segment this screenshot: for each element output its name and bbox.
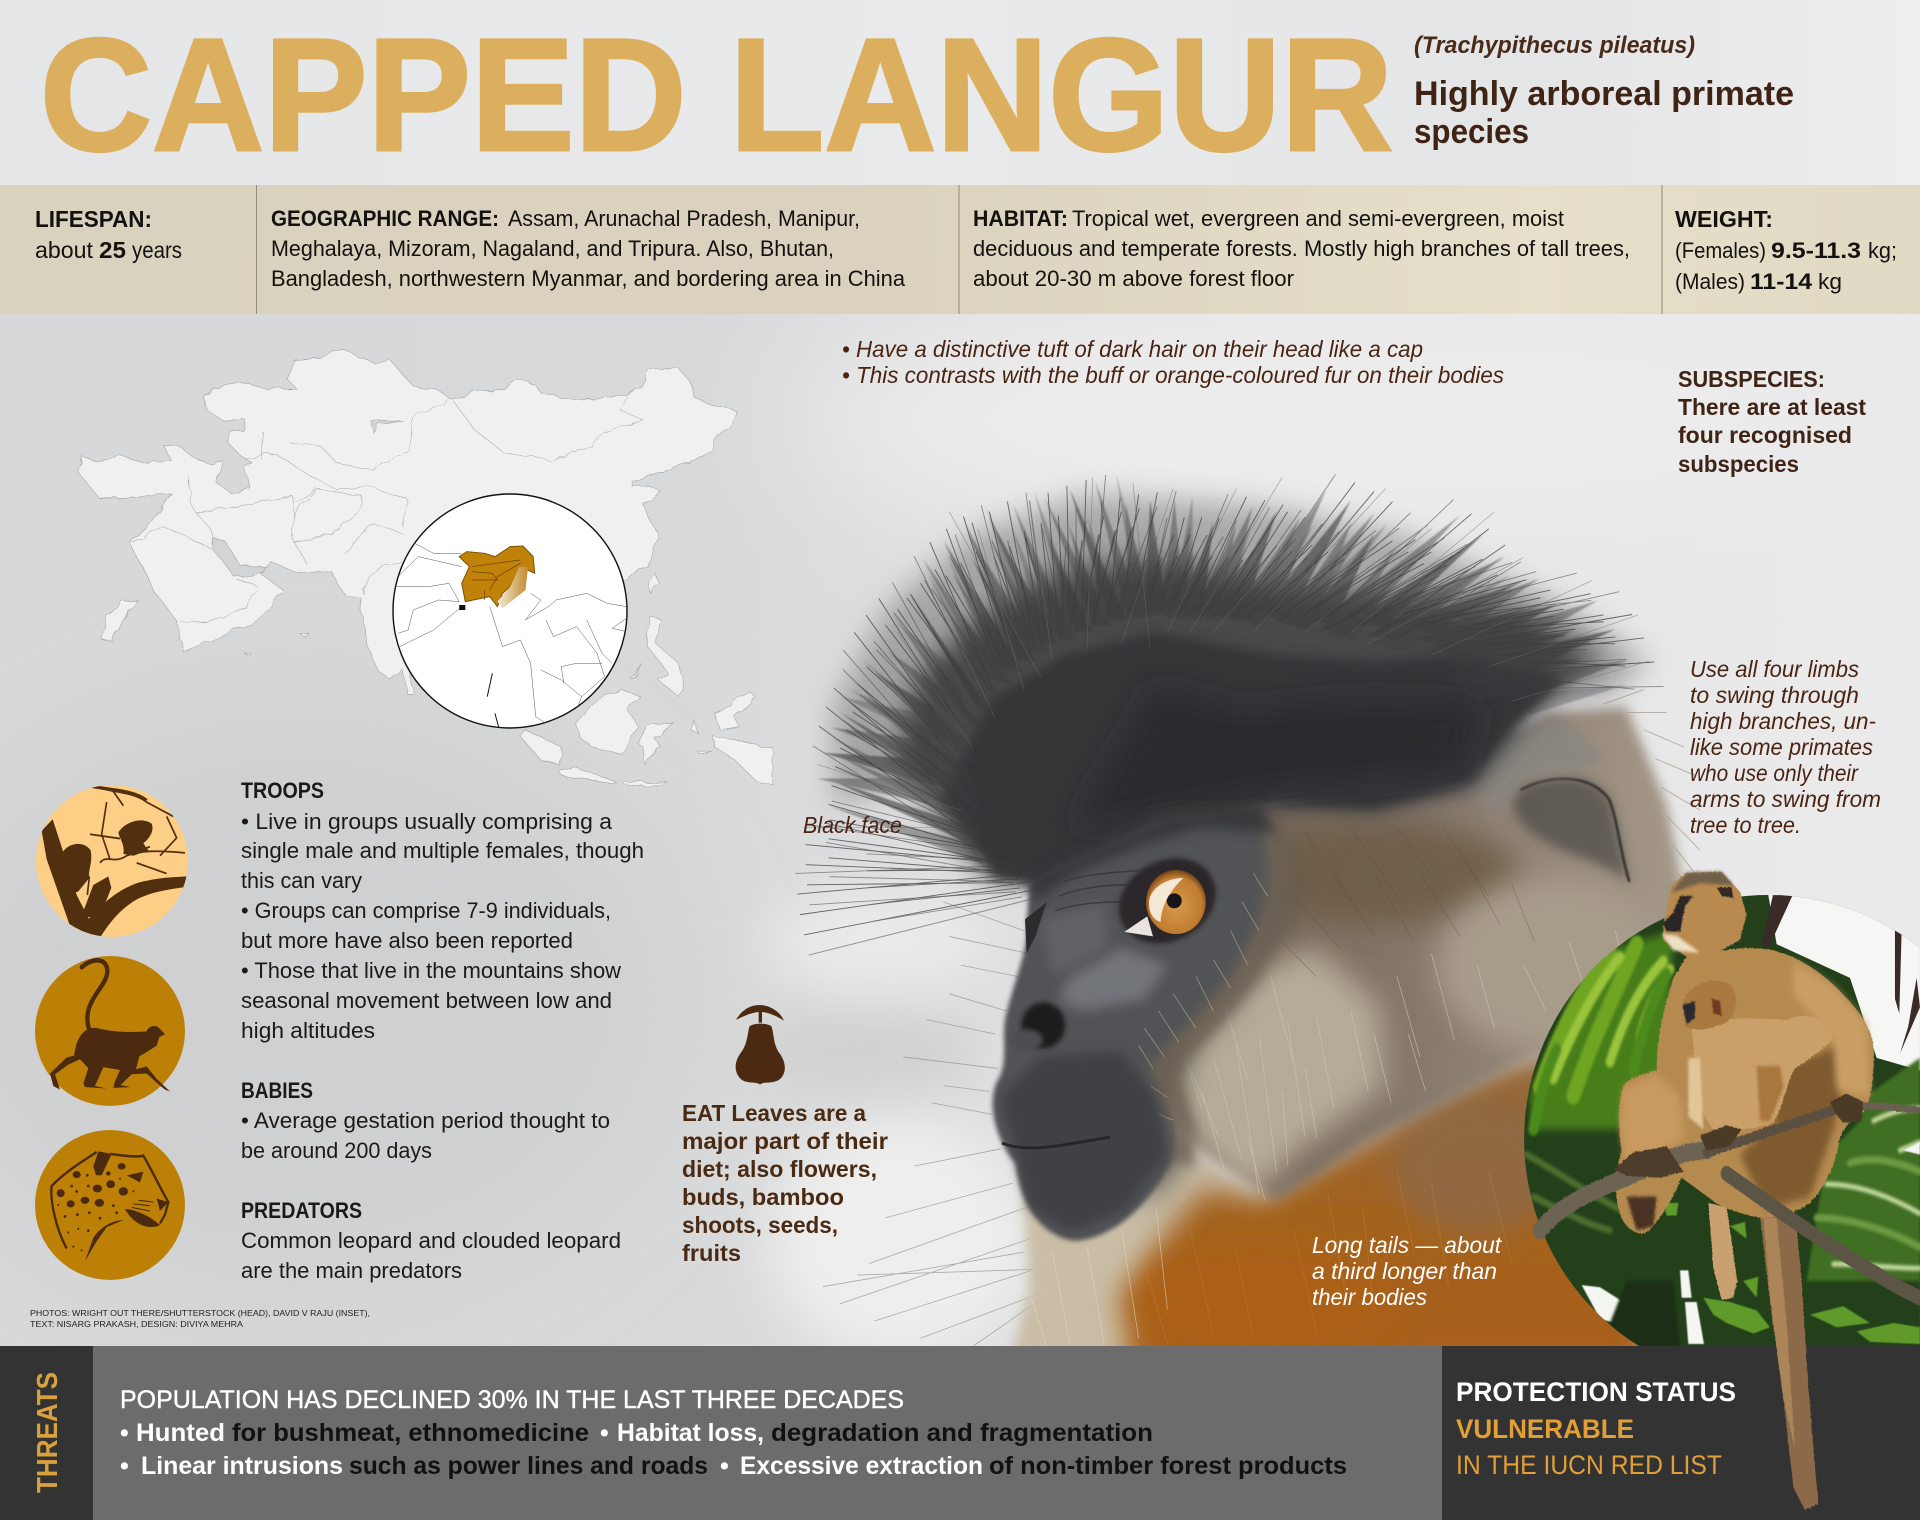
troops text: but more have also been reported [241, 928, 573, 953]
threats line two: Excessive extraction [740, 1452, 983, 1480]
weight: WEIGHT: [1675, 206, 1773, 232]
habitat [973, 206, 1630, 291]
lifespan [35, 206, 182, 263]
geographic range [271, 206, 905, 291]
header background [0, 0, 1920, 185]
babies text: BABIES [241, 1078, 313, 1103]
predators text: are the main predators [241, 1258, 462, 1283]
scientific name: (Trachypithecus pileatus) [1414, 32, 1695, 59]
habitat: Tropical wet, evergreen and semi-evergreen, moist [1072, 206, 1565, 231]
threats line two: • [120, 1452, 129, 1480]
caption: four limbs: to swing through [1690, 682, 1859, 708]
brow folds [1055, 870, 1139, 911]
hands [1830, 1094, 1863, 1123]
map of Asia [79, 350, 773, 786]
geographic range: Meghalaya, Mizoram, Nagaland, and Tripura. Also, Bhutan, [271, 236, 834, 261]
eat text: shoots, seeds, [682, 1212, 838, 1238]
threats line one: Hunted [136, 1419, 225, 1447]
facts band [0, 185, 1920, 314]
subspecies note [1678, 366, 1866, 477]
weight: (Males) [1675, 269, 1745, 294]
branches [1540, 1106, 1920, 1298]
eat text: buds, bamboo [682, 1184, 844, 1210]
predators text: PREDATORS [241, 1198, 362, 1223]
threats line two: • [720, 1452, 729, 1480]
protection status panel: VULNERABLE [1456, 1414, 1634, 1444]
icon: walking langur [35, 956, 185, 1106]
threats headline: POPULATION HAS DECLINED 30% IN THE LAST THREE DECADES [120, 1386, 904, 1414]
habitat: HABITAT: [973, 206, 1068, 231]
soft fur edge over face [1162, 833, 1278, 1163]
fuzzy back of head [1604, 689, 1700, 878]
caption: long tails: a third longer than [1312, 1258, 1497, 1284]
long tail [1760, 1209, 1818, 1510]
eye [1104, 842, 1231, 960]
cap description bullets: • This contrasts with the buff or orange-coloured fur on their bodies [842, 362, 1504, 388]
troops text: high altitudes [241, 1018, 375, 1043]
photo: langur head [764, 440, 1707, 1378]
troops text: • Live in groups usually comprising a [241, 809, 612, 834]
predators text [241, 1198, 621, 1283]
caption: long tails: their bodies [1312, 1284, 1427, 1310]
fur texture [1167, 931, 1632, 1200]
head fur [1156, 707, 1707, 1200]
threats line two: Linear intrusions [141, 1452, 343, 1480]
wispy pale hair under chin [823, 902, 1035, 1346]
caption: four limbs: who use only their [1690, 760, 1859, 786]
locator circle [393, 494, 627, 728]
title: CAPPED LANGUR [40, 5, 1393, 184]
caption: four limbs: high branches, un- [1690, 708, 1876, 734]
caption: four limbs: Use all four limbs [1690, 656, 1859, 682]
orange body [1105, 1048, 1639, 1346]
eat text: major part of their [682, 1128, 888, 1154]
troops text: • Groups can comprise 7-9 individuals, [241, 898, 611, 923]
inset photo: background foliage [1500, 860, 1920, 1348]
caption: long tails [1312, 1232, 1503, 1310]
threats line one: Habitat loss, [617, 1419, 764, 1447]
icon: troop silhouette [36, 785, 188, 938]
eat text: fruits [682, 1240, 741, 1266]
subspecies note: four recognised [1678, 422, 1852, 448]
lifespan: 25 [99, 237, 126, 263]
weight: 11-14 [1750, 269, 1813, 294]
threats line one: • [600, 1419, 609, 1447]
caption: black face: Black face [803, 812, 902, 838]
subspecies note: SUBSPECIES: [1678, 366, 1825, 392]
ear [1513, 777, 1629, 882]
troops text: seasonal movement between low and [241, 988, 612, 1013]
threats line one: degradation and fragmentation [771, 1419, 1153, 1447]
weight [1675, 206, 1897, 294]
dark cap mass [898, 558, 1604, 879]
baby body [1692, 1016, 1833, 1130]
weight: kg; [1868, 238, 1897, 263]
caption: four limbs [1690, 656, 1881, 838]
cap description bullets: • Have a distinctive tuft of dark hair on their head like a cap [842, 336, 1423, 362]
subspecies note: There are at least [1678, 394, 1866, 420]
thin hair strands [795, 474, 1664, 956]
habitat: deciduous and temperate forests. Mostly high branches of tall trees, [973, 236, 1630, 261]
protection status panel: IN THE IUCN RED LIST [1456, 1450, 1722, 1480]
geographic range: GEOGRAPHIC RANGE: [271, 206, 499, 231]
lifespan: LIFESPAN: [35, 206, 152, 232]
troops text: • Those that live in the mountains show [241, 958, 622, 983]
pale cheek [1162, 948, 1385, 1195]
nostril [1022, 1002, 1065, 1048]
mother head [1663, 872, 1747, 957]
subtitle: Highly arboreal primate [1414, 75, 1794, 113]
mouth [1002, 1137, 1110, 1148]
icon: leopard head [35, 1130, 185, 1280]
credits: PHOTOS: WRIGHT OUT THERE/SHUTTERSTOCK (HEAD), DAVID V RAJU (INSET), [30, 1308, 370, 1318]
brow hair over face [1027, 804, 1276, 902]
weight: 9.5-11.3 [1771, 238, 1861, 263]
eat text [682, 1100, 888, 1266]
bright leaves glow [1530, 932, 1673, 1129]
caption: four limbs: arms to swing from [1690, 786, 1881, 812]
babies text: be around 200 days [241, 1138, 432, 1163]
pale throat fur [1012, 1143, 1259, 1355]
caption: four limbs: tree to tree. [1690, 812, 1801, 838]
caption: long tails: Long tails — about [1312, 1232, 1503, 1258]
threats label: THREATS [32, 1372, 64, 1493]
icon: pear [736, 1005, 785, 1085]
subspecies note: subspecies [1678, 451, 1799, 477]
cap description bullets [842, 336, 1504, 388]
geographic range: Assam, Arunachal Pradesh, Manipur, [508, 206, 860, 231]
face shadow blend [1139, 879, 1294, 1213]
caption: four limbs: like some primates [1690, 734, 1873, 760]
baby tail [1708, 1203, 1737, 1300]
threats line two: such as power lines and roads [349, 1452, 708, 1480]
credits [30, 1308, 370, 1329]
weight: kg [1818, 269, 1842, 294]
muzzle [1001, 1051, 1167, 1232]
hair halo [834, 494, 1650, 804]
protection status panel [1442, 1346, 1920, 1520]
inset photo: mother and baby langur [1540, 872, 1920, 1510]
threats line one: • [120, 1419, 129, 1447]
face [993, 816, 1272, 1241]
cheek hair over face edge [1139, 873, 1268, 1120]
lifespan: years [132, 237, 182, 263]
body [1616, 948, 1874, 1233]
eat text: EAT Leaves are a [682, 1100, 867, 1126]
troops text: single male and multiple females, though [241, 838, 644, 863]
cap hair spikes [818, 477, 1628, 864]
troops text: this can vary [241, 868, 363, 893]
troops text: TROOPS [241, 778, 324, 803]
baby head [1683, 981, 1736, 1029]
troops text [241, 778, 644, 1043]
threats line two: of non-timber forest products [989, 1452, 1347, 1480]
predators text: Common leopard and clouded leopard [241, 1228, 621, 1253]
weight: (Females) [1675, 238, 1766, 263]
threats line one [120, 1419, 1153, 1447]
eat text: diet; also flowers, [682, 1156, 877, 1182]
credits: TEXT: NISARG PRAKASH, DESIGN: DIVIYA MEHRA [30, 1319, 243, 1329]
babies text: • Average gestation period thought to [241, 1108, 610, 1133]
cheekbone highlight [1058, 948, 1167, 1011]
protection status panel: PROTECTION STATUS [1456, 1377, 1736, 1407]
subtitle: species [1414, 113, 1529, 151]
geographic range: Bangladesh, northwestern Myanmar, and bordering area in China [271, 266, 905, 291]
subtitle [1414, 75, 1794, 151]
babies text [241, 1078, 610, 1163]
habitat: about 20-30 m above forest floor [973, 266, 1294, 291]
threats panel [0, 1346, 1442, 1520]
lifespan: about [35, 237, 94, 263]
threats line one: for bushmeat, ethnomedicine [232, 1419, 589, 1447]
threats line two [120, 1452, 1347, 1480]
